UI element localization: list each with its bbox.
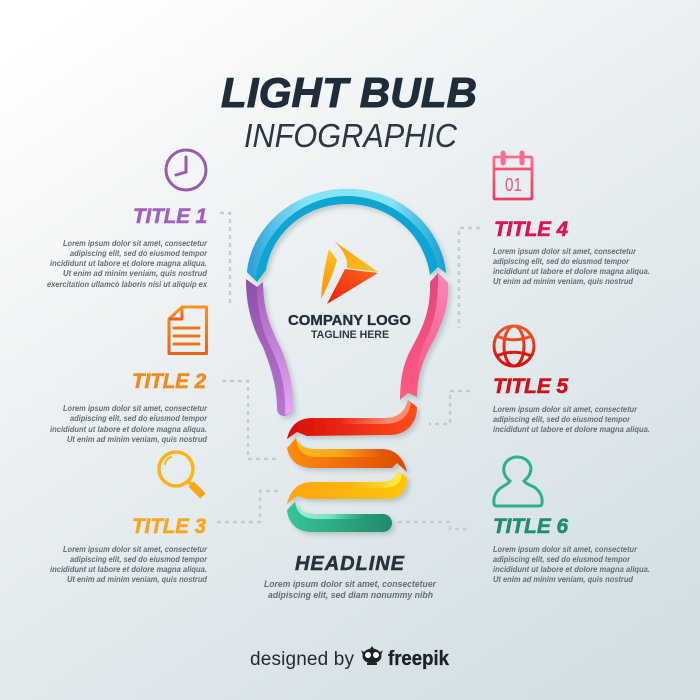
icon: globe [494,326,534,366]
attribution: designed by [250,649,354,670]
panel: title 1: exercitation ullamco laboris nisi ut aliquip ex [47,279,208,289]
panel: title 4: Ut enim ad minim veniam, quis nostrud [493,276,634,286]
title: LIGHT BULB [221,69,477,116]
panel: title 6: incididunt ut labore et dolore magna aliqua. [493,564,650,574]
icon: clock [166,150,206,190]
bulb segment: pink right [400,273,448,400]
panel: title 5: TITLE 5 [493,375,568,398]
icon: calendar: 01 [505,175,522,195]
panel: title 1 [47,150,208,289]
panel: title 5 [493,326,650,434]
light bulb [246,189,448,532]
panel: title 3: adipiscing elit, sed do eiusmod tempor [70,554,208,564]
panel: title 6: TITLE 6 [493,515,568,538]
panel: title 6 [493,457,650,584]
panel: title 3 [50,452,208,584]
panel: title 3: Ut enim ad minim veniam, quis nostrud [67,574,208,584]
panel: title 3: incididunt ut labore et dolore magna aliqua. [50,564,207,574]
panel: title 3: TITLE 3 [132,515,206,538]
bulb segment: green coil [287,502,392,532]
panel: title 1: adipiscing elit, sed do eiusmod tempor [70,248,208,258]
title [221,69,477,154]
panel: title 6: Lorem ipsum dolor sit amet, consectetur [493,544,638,554]
panel: title 1: incididunt ut labore et dolore magna aliqua. [50,258,207,268]
bulb segment: purple left [246,279,293,416]
panel: title 1: TITLE 1 [133,205,207,228]
bulb segment: blue arc [247,189,446,282]
panel: title 2: Ut enim ad minim veniam, quis nostrud [67,434,208,444]
panel: title 2: TITLE 2 [132,370,206,393]
panel: title 5: Lorem ipsum dolor sit amet, consectetur [493,404,638,414]
panel: title 1: Ut enim ad minim veniam, quis nostrud [63,268,208,278]
panel: title 2: adipiscing elit, sed do eiusmod tempor [70,413,208,423]
title: INFOGRAPHIC [244,117,458,154]
headline [264,553,436,600]
bulb segment: yellow coil [287,471,407,504]
attribution: freepik [388,648,450,670]
panel: title 2: incididunt ut labore et dolore magna aliqua. [50,424,207,434]
icon: freepik mascot [361,646,383,665]
panel: title 4: TITLE 4 [494,218,568,241]
company logo: COMPANY LOGO [288,312,411,329]
company logo [288,241,411,341]
panel: title 2: Lorem ipsum dolor sit amet, consectetur [63,403,208,413]
icon: person [494,457,542,506]
panel: title 5: incididunt ut labore et dolore magna aliqua. [493,424,650,434]
bulb segment: red coil [287,400,417,439]
bulb segment: orange coil [287,438,407,472]
logo mark [321,241,378,304]
headline: HEADLINE [295,553,405,575]
panel: title 4: incididunt ut labore et dolore magna aliqua. [493,266,650,276]
panel: title 4: Lorem ipsum dolor sit amet, consectetur [493,246,637,256]
headline: adipiscing elit, sed diam nonummy nibh [268,590,433,600]
panel: title 5: adipiscing elit, sed do eiusmod tempor [493,414,631,424]
icon: document [169,307,206,354]
icon: magnifier [159,452,203,496]
panel: title 3: Lorem ipsum dolor sit amet, consectetur [63,544,208,554]
company logo: TAGLINE HERE [311,329,389,341]
connector lines [217,213,480,529]
panel: title 4: adipiscing elit, sed do eiusmod tempor [493,256,630,266]
headline: Lorem ipsum dolor sit amet, consectetuer [264,579,436,589]
panel: title 2 [50,307,208,444]
panel: title 1: Lorem ipsum dolor sit amet, consectetur [63,238,208,248]
panel: title 6: adipiscing elit, sed do eiusmod tempor [493,554,631,564]
attribution [250,646,450,670]
panel: title 6: Ut enim ad minim veniam, quis nostrud [493,574,634,584]
panel: title 4 [493,153,650,286]
icon: calendar [494,153,532,199]
